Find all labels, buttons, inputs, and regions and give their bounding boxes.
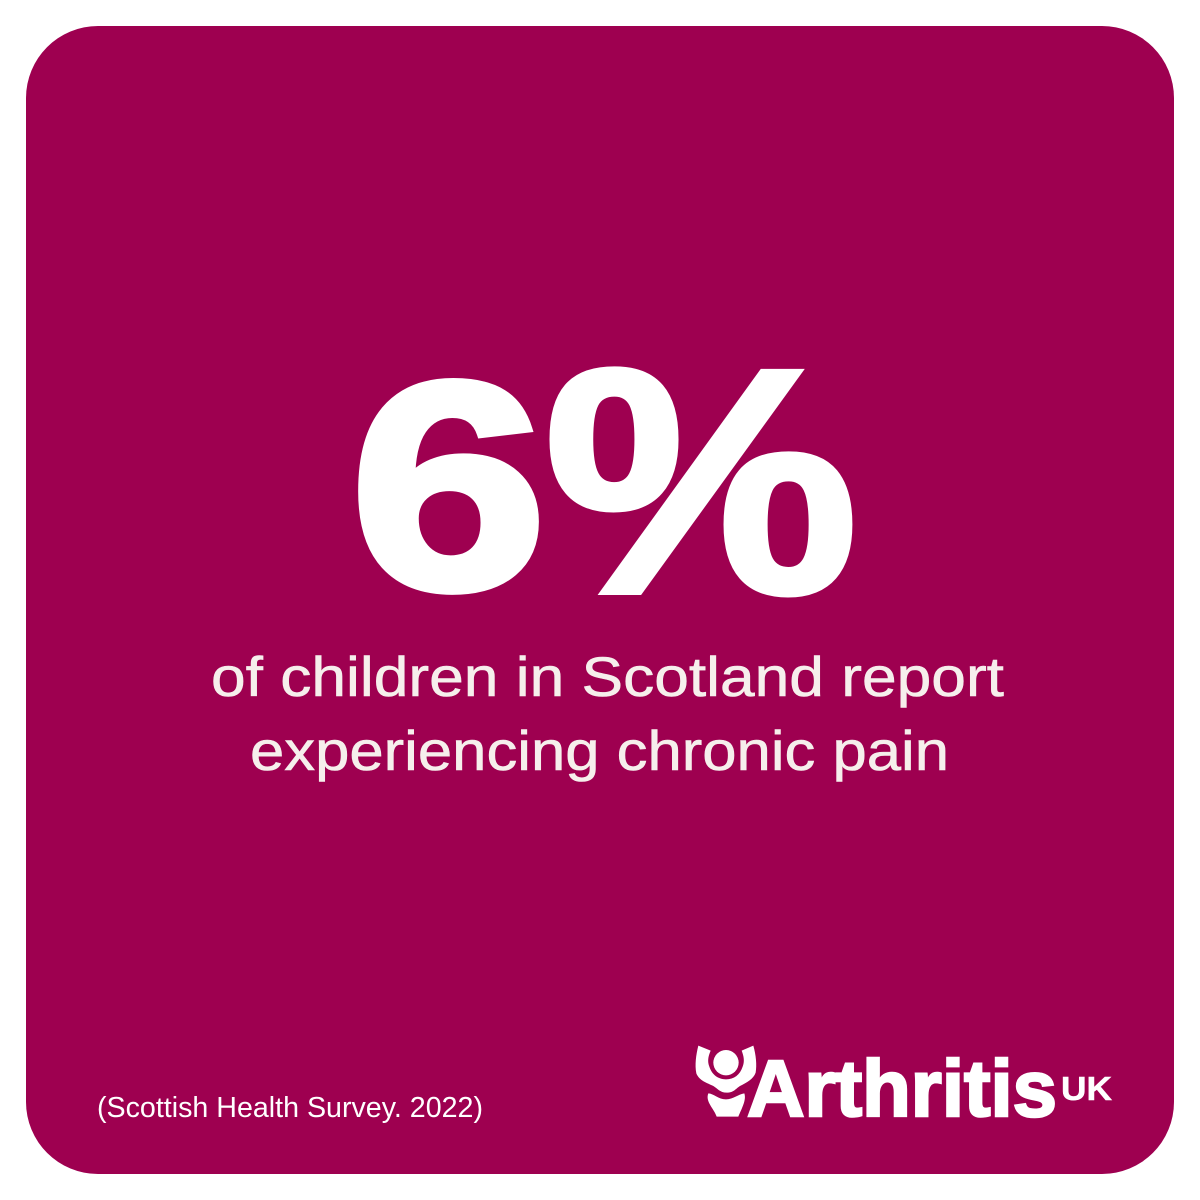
big number: 6%: 6	[350, 322, 547, 651]
big number: 6%: %	[544, 304, 858, 660]
wordmark: Arthritis	[747, 1044, 1057, 1133]
wordmark: UK: UK	[1061, 1070, 1112, 1107]
logo: Arthritis UK	[696, 1044, 1112, 1133]
statement text: experiencing chronic pain	[250, 719, 949, 782]
icon: person with raised arms	[696, 1046, 756, 1117]
statement text: of children in Scotland report	[211, 645, 1004, 708]
statement text	[211, 645, 1004, 782]
big number: 6%	[350, 304, 858, 660]
source citation: (Scottish Health Survey. 2022)	[97, 1092, 483, 1124]
